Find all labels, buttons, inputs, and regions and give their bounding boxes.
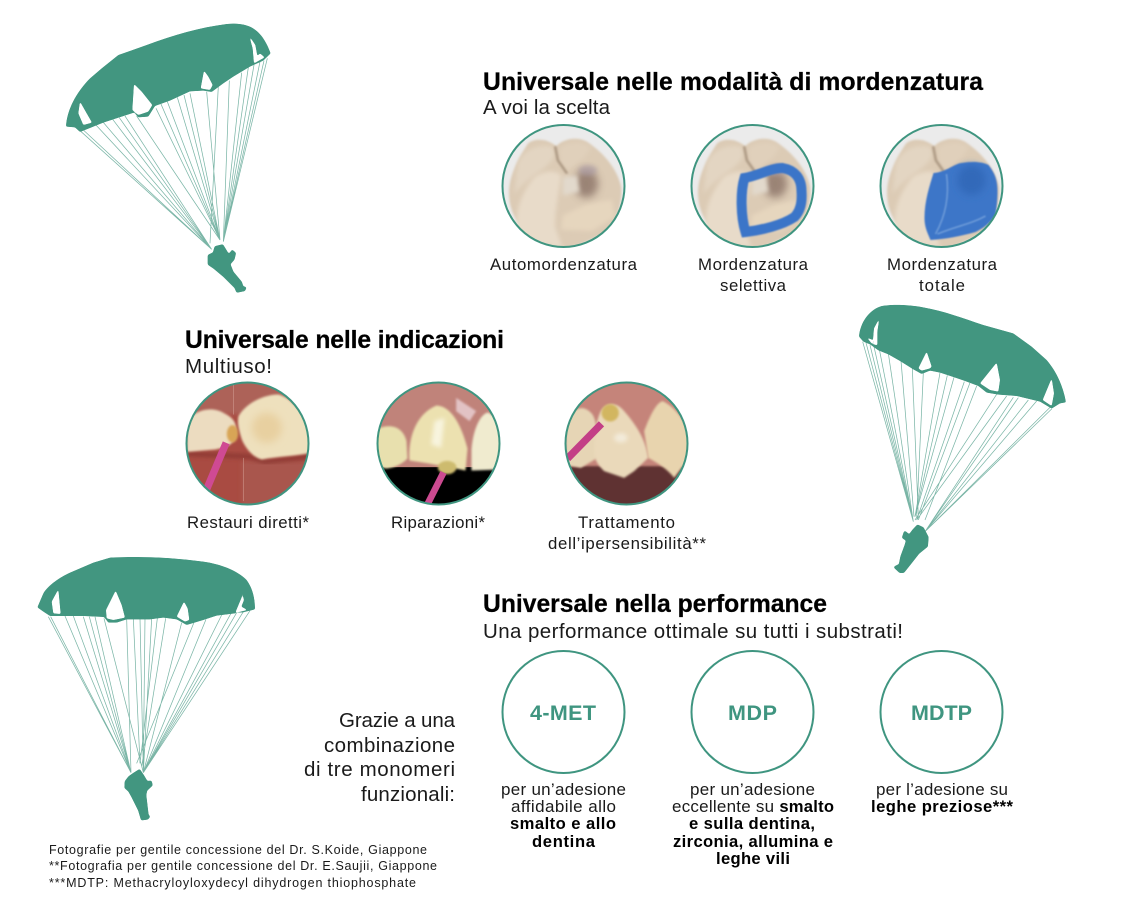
circle: MDP — [692, 651, 814, 773]
heading: Universale nelle modalità di mordenzatura — [483, 69, 983, 96]
side text: combinazione — [324, 734, 455, 757]
parachute lines — [863, 342, 1052, 532]
text: 4-MET description: dentina — [532, 832, 596, 851]
section: etching modes — [483, 69, 1007, 295]
section: performance — [304, 591, 1014, 868]
canopy — [859, 305, 1066, 409]
parachute lines — [80, 58, 267, 249]
photo: total etch tooth — [880, 124, 1004, 248]
side text: di tre monomeri — [304, 758, 455, 781]
photo: hypersensitivity treatment — [564, 382, 688, 506]
text: MDP description — [672, 780, 834, 868]
side text — [304, 709, 456, 806]
label: Riparazioni* — [391, 513, 485, 532]
skydiver — [895, 526, 927, 572]
parachutist: right — [859, 305, 1066, 572]
skydiver — [209, 246, 245, 291]
heading: Universale nella performance — [483, 591, 827, 618]
circle: 4-MET: 4-MET — [530, 701, 596, 725]
text: MDTP description — [871, 780, 1014, 816]
photo: direct restoration — [186, 382, 310, 506]
text: MDP description: e sulla dentina, — [689, 814, 815, 833]
label: Mordenzatura — [698, 255, 809, 274]
skydiver — [126, 771, 151, 819]
label — [887, 255, 998, 295]
text: MDP description: leghe vili — [716, 849, 790, 868]
section: indications — [182, 327, 706, 553]
subheading: Una performance ottimale su tutti i substrati! — [483, 620, 903, 643]
side text: funzionali: — [361, 783, 455, 806]
label: Restauri diretti* — [187, 513, 309, 532]
circle: MDTP: MDTP — [911, 701, 972, 725]
parachutist: top left — [66, 24, 271, 291]
photo: selective etch tooth — [690, 124, 814, 248]
text: 4-MET description: affidabile allo — [511, 797, 616, 816]
side text: Grazie a una — [339, 709, 456, 732]
text: MDP description: eccellente su smalto — [672, 797, 834, 816]
circle: MDTP — [880, 651, 1002, 773]
photo: repairs — [376, 382, 500, 506]
parachutist: bottom left — [37, 557, 255, 819]
heading: Universale nelle indicazioni — [185, 327, 504, 354]
label: Trattamento — [578, 513, 675, 532]
label: Automordenzatura — [490, 255, 638, 274]
footnotes: Fotografie per gentile concessione del Dr. S.Koide, Giappone — [49, 843, 427, 857]
footnotes — [49, 843, 437, 890]
subheading: Multiuso! — [185, 355, 272, 378]
text: 4-MET description: per un’adesione — [501, 780, 626, 799]
text: MDTP description: leghe preziose*** — [871, 797, 1014, 816]
subheading: A voi la scelta — [483, 96, 611, 119]
canopy — [37, 557, 255, 625]
footnotes: **Fotografia per gentile concessione del Dr. E.Saujii, Giappone — [49, 859, 437, 873]
label — [548, 513, 706, 553]
circle: MDP: MDP — [728, 701, 777, 725]
label: selettiva — [720, 276, 787, 295]
label — [698, 255, 809, 295]
label: totale — [919, 276, 965, 295]
text: MDTP description: per l’adesione su — [876, 780, 1008, 799]
label: dell’ipersensibilità** — [548, 534, 706, 553]
parachute lines — [48, 611, 250, 773]
text: 4-MET description — [501, 780, 626, 851]
text: 4-MET description: smalto e allo — [510, 814, 616, 833]
canopy — [66, 24, 271, 132]
text: MDP description: zirconia, allumina e — [673, 832, 833, 851]
footnotes: ***MDTP: Methacryloyloxydecyl dihydrogen thiophosphate — [49, 876, 416, 890]
photo: self-etch tooth — [502, 124, 626, 248]
text: MDP description: per un’adesione — [690, 780, 815, 799]
label: Mordenzatura — [887, 255, 998, 274]
circle: 4-MET — [502, 651, 624, 773]
